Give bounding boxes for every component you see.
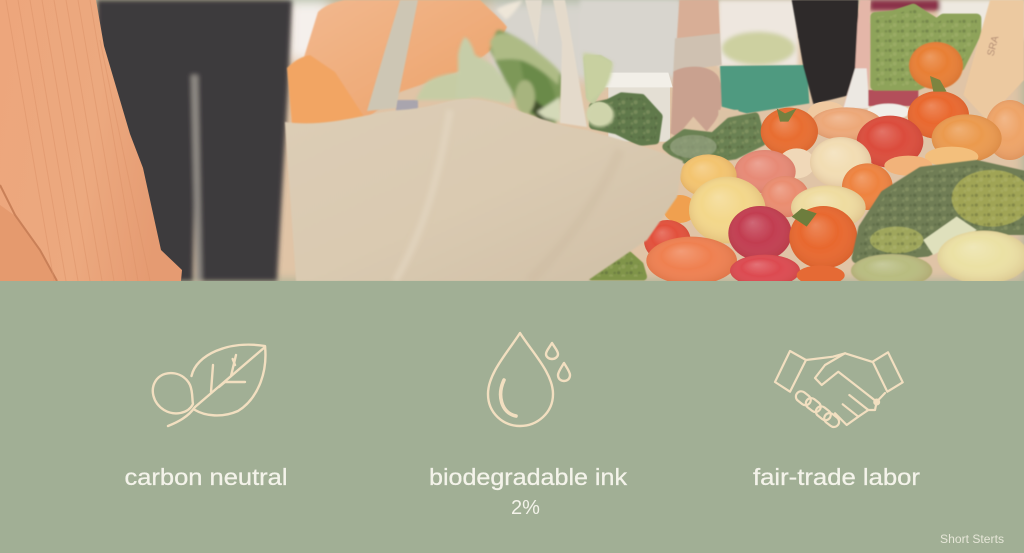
panel: market photo — [0, 0, 1024, 287]
panel: green info band — [0, 281, 1024, 553]
bag handles — [367, 0, 587, 127]
label: fair-trade labor: fair-trade labor — [753, 464, 920, 490]
produce display: broccoli — [588, 165, 1024, 287]
label: biodegradable ink: biodegradable ink — [429, 464, 628, 490]
footer brand: Short Sterts — [940, 534, 1004, 546]
right background scene — [580, 0, 1024, 287]
produce display: fruit — [644, 76, 1024, 287]
white tub — [603, 73, 673, 142]
orange sweater sleeve — [0, 0, 182, 281]
icon: handshake — [775, 351, 903, 429]
photo background — [0, 0, 1024, 281]
orange cloth in bag — [287, 0, 507, 137]
canvas tote bag — [285, 99, 683, 281]
label: 2%: 2% — [511, 497, 540, 519]
icon: water drop — [488, 333, 570, 426]
leafy greens behind bag — [587, 58, 762, 162]
right background scene: SRA — [986, 34, 1002, 57]
label: carbon neutral: carbon neutral — [124, 464, 288, 490]
icon: leaf — [153, 345, 265, 426]
legs of passer-by — [97, 0, 292, 281]
lettuce in bag — [416, 0, 614, 127]
